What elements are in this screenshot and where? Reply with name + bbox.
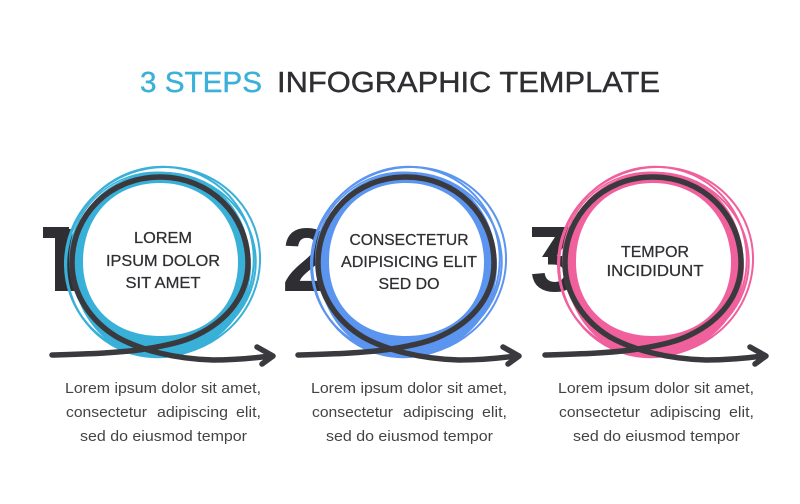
description xyxy=(65,381,261,445)
step 2 xyxy=(277,132,535,445)
circle label: IPSUM DOLOR xyxy=(106,253,220,270)
dark arrow loop xyxy=(545,177,766,364)
scribbled blue circle xyxy=(31,132,289,392)
circle label: CONSECTETUR xyxy=(350,232,468,249)
circle label: LOREM xyxy=(134,230,192,247)
description: Lorem ipsum dolor sit amet, xyxy=(311,381,507,397)
description xyxy=(311,381,507,445)
description: elit, xyxy=(729,405,754,421)
circle label: INCIDIDUNT xyxy=(606,263,704,280)
description: consectetur xyxy=(312,405,393,421)
step 1 xyxy=(43,166,276,444)
description: adipiscing xyxy=(650,405,721,421)
title xyxy=(140,67,660,99)
step 3 xyxy=(532,166,769,444)
description: sed do eiusmod tempor xyxy=(80,429,247,445)
number 3 xyxy=(532,227,570,292)
scribbled blue circle xyxy=(277,132,535,392)
dark arrow loop xyxy=(298,177,519,364)
description: elit, xyxy=(482,405,507,421)
circle label xyxy=(341,232,478,293)
circle label: SED DO xyxy=(378,276,440,293)
description: elit, xyxy=(236,405,261,421)
description: consectetur xyxy=(559,405,640,421)
circle label: SIT AMET xyxy=(126,275,201,292)
scribbled pink circle xyxy=(524,132,782,392)
number 2: 2 xyxy=(282,211,332,311)
number 3: 3 xyxy=(530,211,580,311)
circle label: TEMPOR xyxy=(621,244,689,261)
description xyxy=(558,381,754,445)
description: Lorem ipsum dolor sit amet, xyxy=(65,381,261,397)
dark arrow loop xyxy=(52,177,273,364)
description: Lorem ipsum dolor sit amet, xyxy=(558,381,754,397)
number 1: 1 xyxy=(39,211,89,311)
title: INFOGRAPHIC TEMPLATE xyxy=(277,67,660,99)
title: 3 STEPS xyxy=(140,67,262,99)
description: sed do eiusmod tempor xyxy=(573,429,740,445)
description: consectetur xyxy=(66,405,147,421)
number 1 xyxy=(43,227,74,291)
description: sed do eiusmod tempor xyxy=(326,429,493,445)
circle label xyxy=(106,230,220,292)
description: adipiscing xyxy=(403,405,474,421)
circle label xyxy=(606,244,704,280)
circle label: ADIPISICING ELIT xyxy=(341,254,478,271)
description: adipiscing xyxy=(157,405,228,421)
